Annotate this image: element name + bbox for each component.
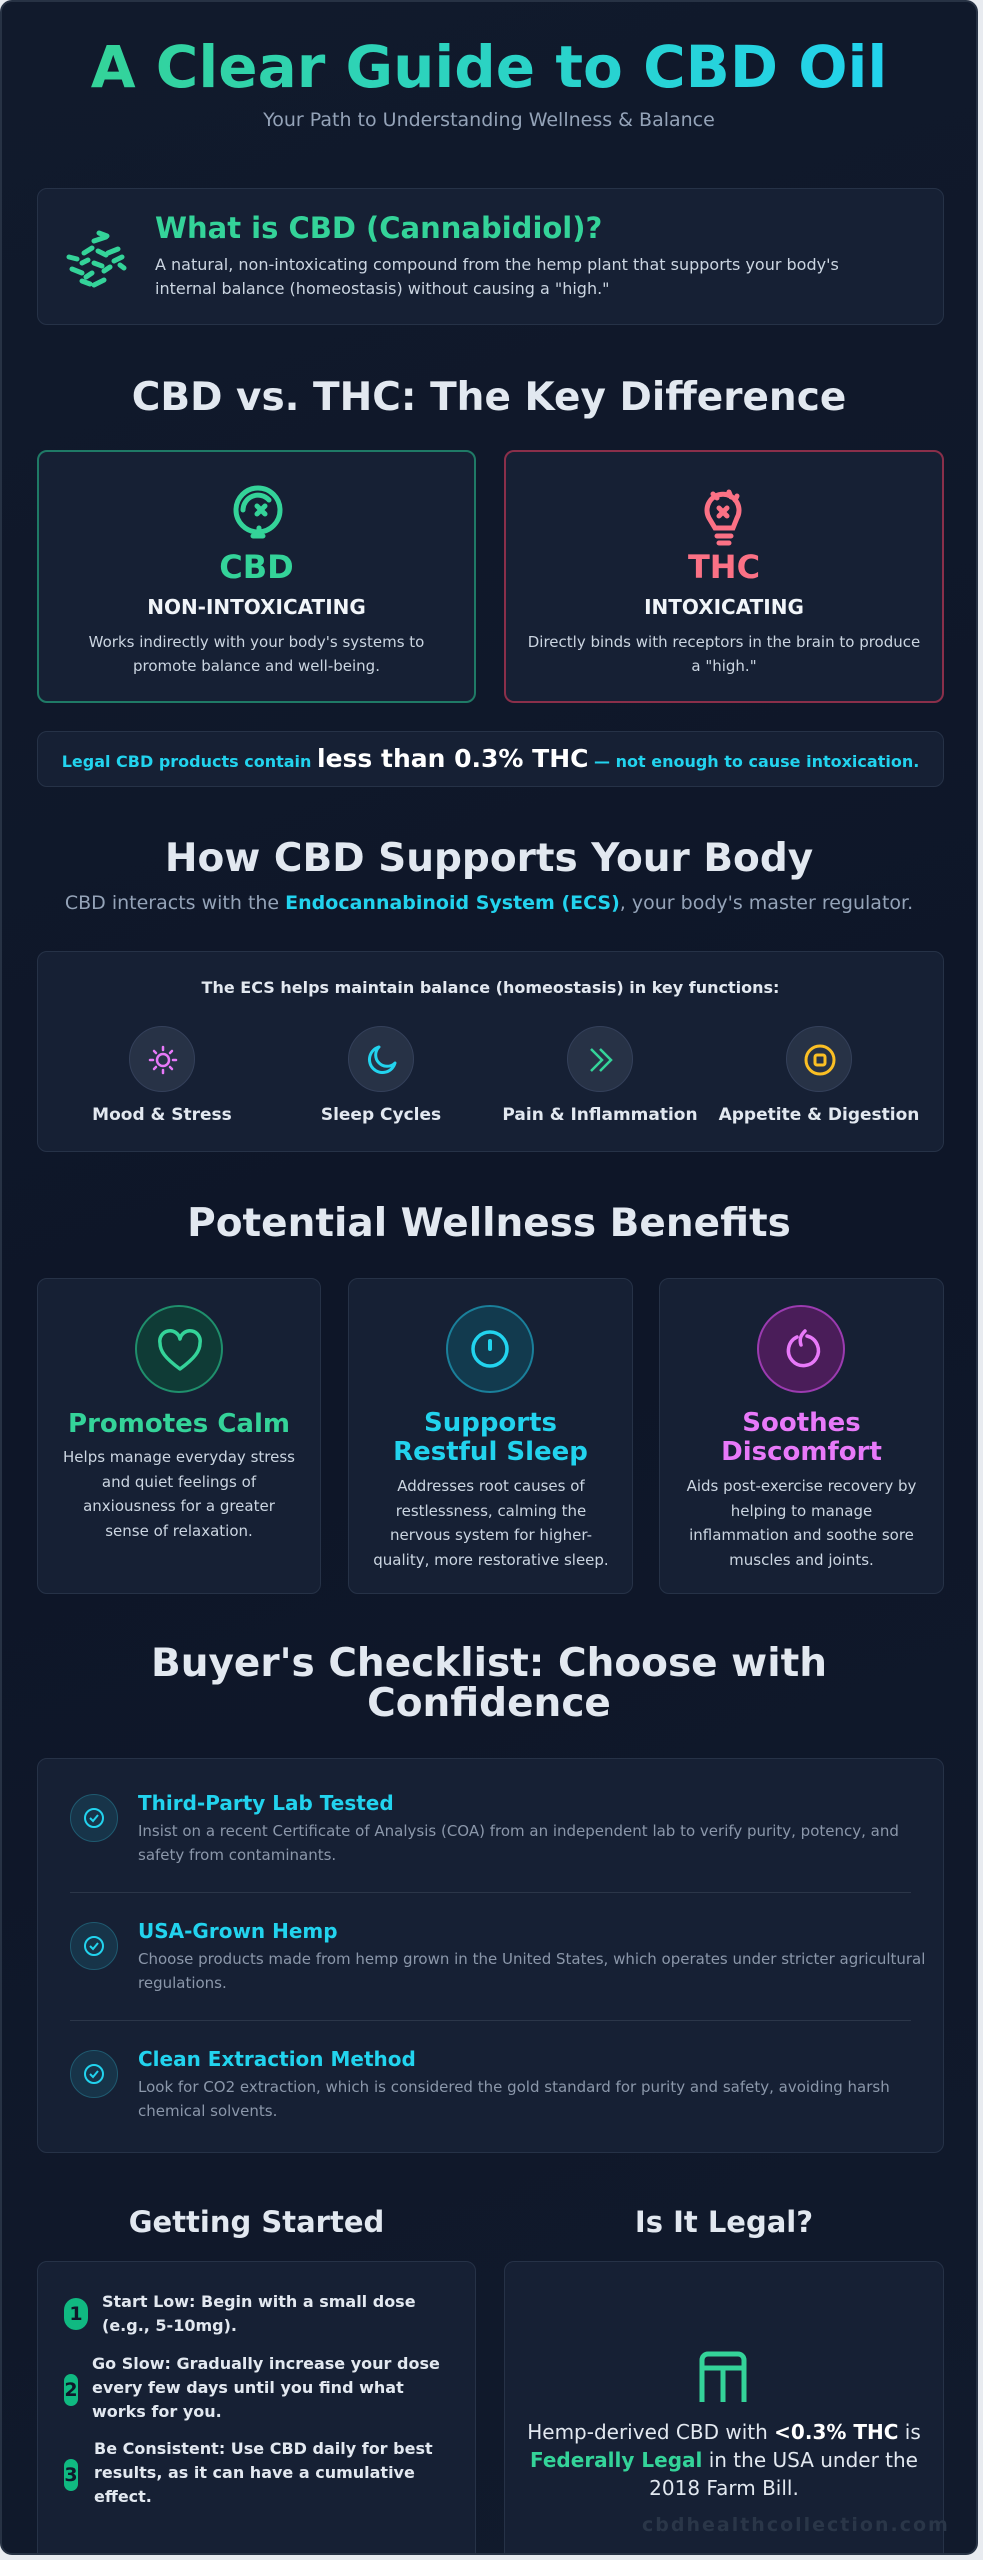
heading: benefits: Potential Wellness Benefits	[187, 1201, 791, 1246]
item: extraction	[70, 2047, 890, 2120]
item: lab tested: Third-Party Lab Tested	[138, 1791, 394, 1815]
panel: ECS functions: Pain & Inflammation	[502, 1105, 698, 1125]
panel: checklist	[37, 1758, 944, 2153]
heading: buyer's checklist: Buyer's Checklist: Choose with	[151, 1641, 827, 1686]
item: USA hemp	[70, 1919, 925, 1992]
icon: flame	[757, 1305, 845, 1393]
panel: ECS functions: Appetite & Digestion	[719, 1105, 919, 1125]
item: mood	[92, 1026, 232, 1125]
panel: legality	[504, 2261, 944, 2560]
panel: ECS functions: Mood & Stress	[92, 1105, 232, 1125]
icon: molecule	[66, 230, 126, 288]
icon: heart	[135, 1305, 223, 1393]
watermark: cbdhealthcollection.com	[642, 2514, 950, 2536]
item: sleep	[321, 1026, 441, 1125]
panel: restful sleep	[348, 1278, 633, 1594]
panel: what is CBD	[37, 188, 944, 325]
step 3: Be Consistent: Use CBD daily for best results, as it can have a cumulative effect.	[94, 2439, 433, 2506]
panel: CBD: NON-INTOXICATING	[147, 595, 366, 619]
text: Directly binds with receptors in the brain to produce a "high."	[528, 633, 920, 675]
title	[721, 1408, 882, 1467]
item: lab tested: Insist on a recent Certificate of Analysis (COA) from an independent lab to verify purity, potency, and safety from contaminants.	[138, 1822, 899, 1864]
panel: soothes discomfort	[659, 1278, 944, 1594]
step 2: 2	[64, 2379, 78, 2401]
step 1: Start Low: Begin with a small dose (e.g., 5-10mg).	[102, 2292, 416, 2335]
callout: legal THC limit: Legal CBD products contain less than 0.3% THC — not enough to cause intoxication.	[62, 744, 919, 773]
heading: how CBD supports: How CBD Supports Your Body	[165, 836, 813, 881]
heading: getting started: Getting Started	[129, 2205, 384, 2239]
panel: promotes calm	[37, 1278, 321, 1594]
icon: CBD head	[234, 486, 282, 538]
title: Supports	[424, 1408, 557, 1438]
icon: pillar	[700, 2352, 746, 2402]
item: appetite	[718, 1026, 919, 1125]
panel heading: The ECS helps maintain balance (homeostasis) in key functions:	[202, 978, 779, 997]
title: Restful Sleep	[393, 1437, 588, 1467]
heading: CBD vs THC: CBD vs. THC: The Key Difference	[132, 375, 846, 420]
panel: THC: INTOXICATING	[644, 595, 804, 619]
title: Promotes Calm	[68, 1409, 290, 1439]
heading: buyer's checklist: Confidence	[367, 1681, 611, 1726]
panel: ECS functions	[37, 951, 944, 1152]
subtitle: Your Path to Understanding Wellness & Balance	[263, 109, 715, 131]
text: Addresses root causes of restlessness, calming the nervous system for higher-quality, more restorative sleep.	[373, 1477, 609, 1568]
text: Works indirectly with your body's systems to promote balance and well-being.	[89, 633, 424, 675]
text: Aids post-exercise recovery by helping to manage inflammation and soothe sore muscles and joints.	[687, 1477, 916, 1568]
panel: CBD	[37, 450, 476, 703]
heading: buyer's checklist	[151, 1641, 827, 1726]
icon: power	[446, 1305, 534, 1393]
callout: legal THC limit	[37, 731, 944, 787]
text: Helps manage everyday stress and quiet feelings of anxiousness for a greater sense of relaxation.	[63, 1448, 295, 1540]
heading: is it legal: Is It Legal?	[635, 2205, 813, 2239]
title	[393, 1408, 588, 1467]
item: extraction: Look for CO2 extraction, which is considered the gold standard for purity and safety, avoiding harsh chemical solvents.	[138, 2078, 890, 2120]
title: Soothes	[742, 1408, 861, 1438]
title: Discomfort	[721, 1437, 882, 1467]
item: lab tested	[70, 1791, 899, 1864]
step 1: 1	[69, 2303, 83, 2325]
step 3: 3	[64, 2464, 78, 2486]
heading: What is CBD (Cannabidiol)?	[155, 211, 602, 245]
panel: ECS functions: Sleep Cycles	[321, 1105, 441, 1125]
item: pain	[502, 1026, 698, 1125]
icon: THC head	[704, 490, 742, 546]
item: USA hemp: Choose products made from hemp grown in the United States, which operates under stricter agricultural regulations.	[138, 1950, 925, 1992]
subtitle: CBD interacts with the Endocannabinoid System (ECS), your body's master regulator.	[65, 892, 913, 914]
text: A natural, non-intoxicating compound from the hemp plant that supports your body's internal balance (homeostasis) without causing a "high."	[155, 255, 839, 298]
title: A Clear Guide to CBD Oil	[91, 33, 887, 101]
label: CBD	[219, 548, 294, 586]
panel: THC	[504, 450, 944, 703]
label: THC	[688, 548, 760, 586]
item: extraction: Clean Extraction Method	[138, 2047, 416, 2071]
item: USA hemp: USA-Grown Hemp	[138, 1919, 338, 1943]
panel: getting started steps	[37, 2261, 476, 2560]
text: Hemp-derived CBD with <0.3% THC is Federally Legal in the USA under the 2018 Farm Bill.	[527, 2420, 921, 2500]
step 2: Go Slow: Gradually increase your dose every few days until you find what works for you.	[92, 2354, 440, 2421]
